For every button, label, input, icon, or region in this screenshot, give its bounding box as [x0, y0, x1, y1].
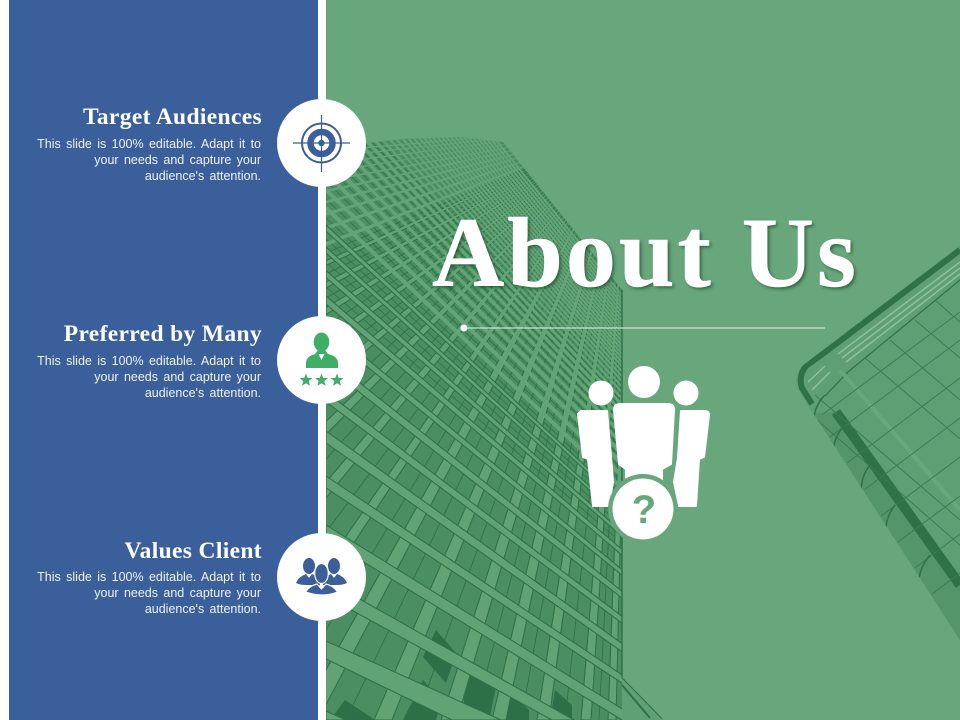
icon: three people with question mark: ? [632, 488, 656, 532]
circle: values client badge [277, 533, 366, 621]
text: Target Audiences description [37, 137, 261, 183]
title: About Us [432, 197, 859, 308]
icon: client group [296, 558, 347, 594]
text: Preferred by Many description: audience's attention. [145, 386, 261, 400]
text: Target Audiences description: your needs and capture your [94, 153, 261, 167]
icon: target [293, 115, 350, 172]
heading: Preferred by Many: Preferred by Many [64, 321, 262, 347]
text: Preferred by Many description: your needs and capture your [94, 370, 261, 384]
heading: Values Client: Values Client [124, 538, 262, 564]
icon: three people with question mark [577, 366, 710, 540]
heading: Target Audiences: Target Audiences [83, 104, 262, 130]
text: Values Client description: your needs and capture your [94, 586, 261, 600]
text: Values Client description: This slide is 100% editable. Adapt it to [37, 570, 261, 584]
divider line with dot [460, 324, 825, 332]
circle: target audiences badge [277, 99, 366, 187]
panel: blue sidebar [9, 0, 318, 720]
text: Values Client description: audience's attention. [145, 602, 261, 616]
panel: green photo background with towers [326, 0, 960, 720]
text: Target Audiences description: This slide is 100% editable. Adapt it to [37, 137, 261, 151]
icon: person with three stars [300, 332, 344, 386]
circle: preferred by many badge [277, 316, 366, 404]
text: Preferred by Many description [37, 354, 261, 400]
text: Values Client description [37, 570, 261, 616]
text: Preferred by Many description: This slide is 100% editable. Adapt it to [37, 354, 261, 368]
text: Target Audiences description: audience's attention. [145, 169, 261, 183]
